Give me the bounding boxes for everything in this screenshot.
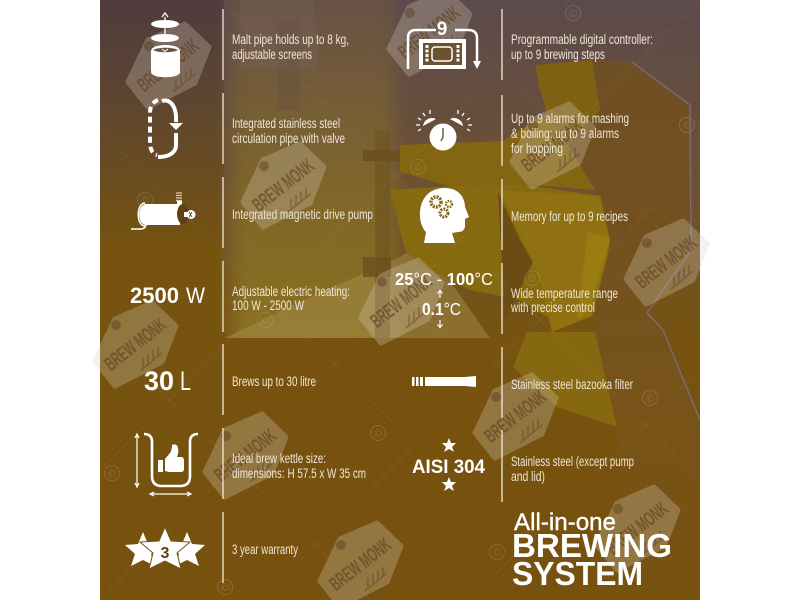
- watermark: copyright marks: [104, 6, 694, 594]
- watermark: brew monk badges: BREW MONK: [366, 271, 437, 333]
- icon: three stars warranty: 3: [161, 545, 170, 562]
- icon: alarm clock: [416, 110, 472, 150]
- background panel: [100, 0, 700, 600]
- watermark: brew monk badges: BREW MONK: [248, 155, 319, 217]
- watermark: copyright marks: ©: [141, 195, 149, 207]
- text: left column: dimensions: H 57.5 x W 35 cm: [232, 466, 366, 481]
- icon: magnetic drive pump: [131, 193, 196, 229]
- text: left column: circulation pipe with valve: [232, 131, 345, 146]
- text: right column: Stainless steel bazooka filter: [511, 377, 633, 392]
- icon: three stars warranty: [125, 527, 205, 569]
- temperature range: [395, 269, 493, 328]
- watermark: brew monk badges: BREW MONK: [631, 232, 702, 294]
- text: right column: Stainless steel (except pump: [511, 454, 634, 469]
- text: left column: [232, 32, 373, 557]
- text: right column: and lid): [511, 469, 545, 484]
- watermark: brew monk badges: BREW MONK: [602, 498, 673, 560]
- icon: 30 L: [144, 366, 191, 396]
- icon: 2500 W: [130, 283, 205, 308]
- watermark: copyright marks: ©: [683, 120, 691, 132]
- watermark: diagonal lines: [100, 0, 700, 600]
- title: SYSTEM: [512, 555, 643, 592]
- watermark: brew monk badges: BREW MONK: [210, 425, 281, 487]
- text: right column: & boiling; up to 9 alarms: [511, 126, 619, 141]
- text: left column: 100 W - 2500 W: [232, 298, 304, 313]
- text: right column: [510, 32, 653, 484]
- watermark: copyright marks: ©: [569, 8, 577, 20]
- watermark: brew monk badges: BREW MONK: [133, 35, 204, 97]
- icon: AISI 304: [412, 438, 485, 491]
- text: left column: Ideal brew kettle size:: [232, 451, 326, 466]
- icon: bazooka filter: [412, 376, 476, 387]
- watermark: copyright marks: ©: [528, 273, 536, 285]
- temperature range: 25°C - 100°C: [395, 269, 493, 289]
- icon: malt pipe: [151, 13, 180, 77]
- icon: head with gears: [420, 188, 469, 243]
- watermark: copyright marks: ©: [493, 547, 501, 559]
- text: left column: Adjustable electric heating:: [232, 284, 350, 299]
- text: left column: Integrated stainless steel: [232, 116, 340, 131]
- text: right column: for hopping: [511, 141, 563, 156]
- watermark: copyright marks: ©: [414, 162, 422, 174]
- text: left column: adjustable screens: [232, 47, 312, 62]
- icon: 30 L: 30: [144, 366, 174, 396]
- watermark: copyright marks: ©: [374, 428, 382, 440]
- text: right column: up to 9 brewing steps: [511, 47, 605, 62]
- icon: kettle size thumbs up: [135, 434, 198, 496]
- icon: 30 L: L: [180, 366, 191, 396]
- text: right column: Memory for up to 9 recipes: [511, 209, 628, 224]
- text: right column: Wide temperature range: [511, 286, 618, 301]
- watermark: copyright marks: ©: [261, 315, 269, 327]
- icon: 2500 W: 2500: [130, 283, 179, 308]
- text: left column: Integrated magnetic drive pump: [232, 207, 373, 222]
- icon: 2500 W: W: [186, 283, 205, 308]
- watermark: copyright marks: ©: [108, 468, 116, 480]
- temperature range: 0.1°C: [422, 299, 461, 319]
- watermark: brew monk badges: BREW MONK: [517, 115, 588, 177]
- watermark: brew monk badges: [95, 0, 707, 600]
- title: [512, 509, 672, 592]
- title: All-in-one: [514, 509, 616, 536]
- icon: AISI 304: AISI 304: [412, 457, 485, 478]
- watermark: copyright marks: ©: [646, 393, 654, 405]
- dividers: [223, 9, 502, 583]
- watermark: copyright marks: ©: [221, 582, 229, 594]
- watermark: brew monk badges: BREW MONK: [480, 386, 551, 448]
- text: left column: Malt pipe holds up to 8 kg,: [232, 32, 349, 47]
- watermark: brew monk badges: BREW MONK: [100, 314, 171, 376]
- text: right column: Programmable digital controller:: [511, 32, 653, 47]
- text: right column: Up to 9 alarms for mashing: [511, 111, 629, 126]
- text: left column: 3 year warranty: [232, 542, 298, 557]
- text: right column: with precise control: [510, 300, 595, 315]
- icon: digital controller: [408, 19, 481, 69]
- watermark: brew monk badges: BREW MONK: [325, 534, 396, 596]
- icon: digital controller: 9: [437, 19, 447, 40]
- icon: circulation pipe: [150, 100, 183, 157]
- title: BREWING: [512, 527, 672, 564]
- text: left column: Brews up to 30 litre: [232, 374, 316, 389]
